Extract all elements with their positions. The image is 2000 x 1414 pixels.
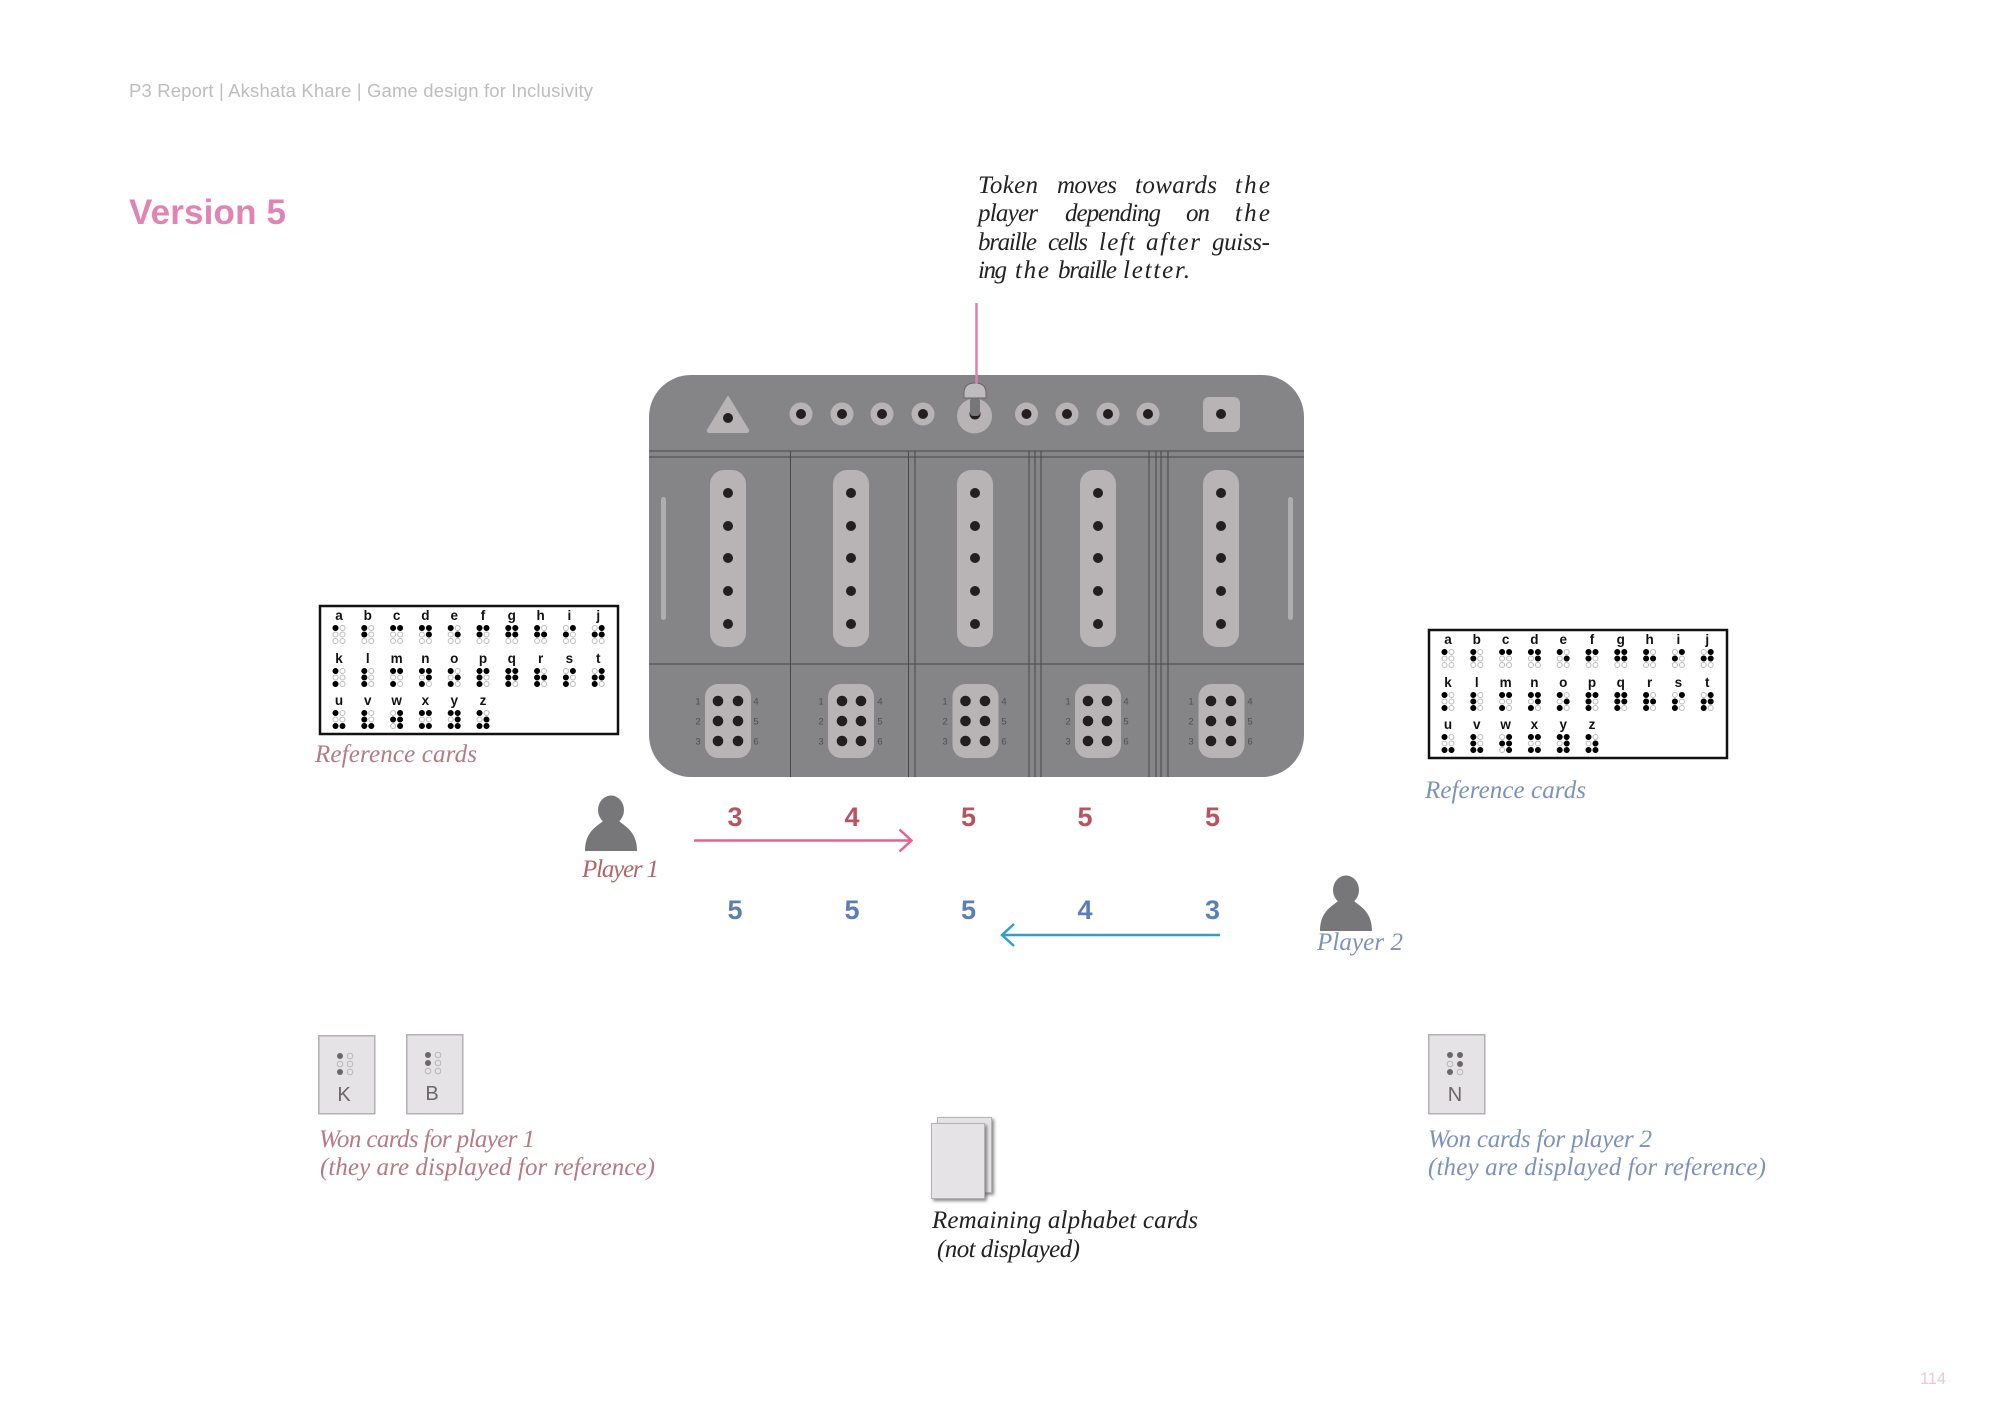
- icon: player 2: [1320, 876, 1372, 931]
- braille cells with numbered dots: 1: [1188, 696, 1194, 708]
- braille cells with numbered dots: 3: [695, 736, 701, 748]
- braille cells with numbered dots: 3: [1065, 736, 1071, 748]
- callout: token movement note: guiss-: [1212, 229, 1270, 256]
- braille cells with numbered dots: 6: [1123, 736, 1129, 748]
- callout: token movement note: after: [1146, 229, 1200, 256]
- callout: token movement note: cells: [1048, 229, 1088, 256]
- braille cells with numbered dots: 4: [877, 696, 883, 708]
- reference card: player 2: i: [1677, 632, 1680, 647]
- reference card: player 1: j: [595, 608, 600, 623]
- label: reference cards player 2: Reference cards: [1424, 777, 1586, 804]
- braille cells with numbered dots: 5: [1123, 716, 1129, 728]
- reference card: player 1: t: [596, 651, 601, 666]
- label: won cards player 1: (they are displayed for reference): [320, 1154, 655, 1181]
- callout: token movement note: on: [1186, 200, 1210, 227]
- reference card: player 2: q: [1617, 675, 1625, 690]
- reference card: player 2: f: [1590, 632, 1595, 647]
- braille cells with numbered dots: 6: [1247, 736, 1253, 748]
- callout: token movement note: depending: [1065, 200, 1161, 227]
- reference card: player 2: h: [1645, 632, 1654, 647]
- braille cells with numbered dots: 1: [1065, 696, 1071, 708]
- reference card: player 2: j: [1704, 632, 1709, 647]
- card: K: K: [337, 1084, 351, 1106]
- braille cells with numbered dots: 2: [942, 716, 948, 728]
- callout: token movement note: left: [1099, 229, 1136, 256]
- braille cells with numbered dots: 2: [1188, 716, 1194, 728]
- reference card: player 2: u: [1444, 717, 1452, 732]
- braille cells with numbered dots: 1: [695, 696, 701, 708]
- callout: token movement note: braille: [978, 229, 1037, 256]
- callout: token movement note: the: [1235, 200, 1270, 227]
- label: remaining alphabet cards: Remaining alphabet cards: [931, 1207, 1198, 1234]
- reference card: player 2: v: [1473, 717, 1481, 732]
- card: B: B: [425, 1083, 439, 1105]
- reference card: player 2: r: [1647, 675, 1653, 690]
- label: won cards player 1: [319, 1126, 655, 1181]
- stack of remaining cards: [932, 1118, 992, 1198]
- reference card: player 1: s: [566, 651, 573, 666]
- braille cells with numbered dots: 6: [753, 736, 759, 748]
- label: won cards player 1: Won cards for player 1: [319, 1126, 535, 1153]
- braille cells with numbered dots: 3: [818, 736, 824, 748]
- panel: game board: [649, 375, 1304, 777]
- card: N: [1429, 1035, 1485, 1114]
- reference card: player 1: r: [538, 651, 544, 666]
- label: player 2: Player 2: [1316, 929, 1403, 956]
- reference card: player 1: z: [480, 693, 487, 708]
- reference card: player 2: b: [1473, 632, 1481, 647]
- braille cells with numbered dots: 2: [818, 716, 824, 728]
- label: player 1: Player 1: [581, 856, 659, 883]
- callout: token movement note: towards: [1135, 172, 1217, 199]
- card: K: [319, 1036, 375, 1114]
- reference card: player 2: e: [1559, 632, 1567, 647]
- title: Version 5: [129, 193, 286, 232]
- braille cells with numbered dots: 5: [877, 716, 883, 728]
- board body: [649, 375, 1304, 777]
- scores: player 2: 4: [1077, 895, 1093, 925]
- reference card: player 1: m: [391, 651, 403, 666]
- reference card: player 1: b: [364, 608, 372, 623]
- reference card: player 1: u: [335, 693, 343, 708]
- label: won cards player 2: (they are displayed for reference): [1428, 1154, 1766, 1181]
- reference card: player 1: v: [364, 693, 372, 708]
- braille cells with numbered dots: 4: [753, 696, 759, 708]
- braille cells with numbered dots: 5: [753, 716, 759, 728]
- reference card: player 2: s: [1675, 675, 1682, 690]
- scores: player 1: 3: [727, 802, 743, 832]
- reference card: player 2: c: [1502, 632, 1510, 647]
- reference card: player 2: a: [1444, 632, 1452, 647]
- reference card: player 2: k: [1444, 675, 1452, 690]
- board divider lines: [649, 451, 1304, 777]
- reference card: player 1: e: [450, 608, 458, 623]
- reference card: player 1: p: [479, 651, 487, 666]
- reference card: player 1: o: [450, 651, 458, 666]
- braille cells with numbered dots: 4: [1001, 696, 1007, 708]
- scores: player 1: 5: [1077, 802, 1093, 832]
- icon: player 1: [585, 796, 637, 851]
- callout: token movement note: letter.: [1123, 257, 1190, 284]
- card: B: [407, 1035, 463, 1114]
- card: N: N: [1448, 1084, 1462, 1106]
- callout: token movement note: braille: [1058, 257, 1117, 284]
- braille cells with numbered dots: 2: [1065, 716, 1071, 728]
- reference card: player 1: y: [450, 693, 458, 708]
- scores: player 2: [727, 895, 1220, 925]
- reference card: player 1: l: [366, 651, 370, 666]
- reference card: player 1: [320, 606, 618, 734]
- reference card: player 2: o: [1559, 675, 1567, 690]
- braille cells with numbered dots: 2: [695, 716, 701, 728]
- reference card: player 2: t: [1705, 675, 1710, 690]
- reference card: player 1: i: [568, 608, 571, 623]
- reference card: player 2: l: [1475, 675, 1479, 690]
- braille cells with numbered dots: 6: [877, 736, 883, 748]
- leader line to token: [975, 303, 978, 384]
- scores: player 2: 3: [1205, 895, 1220, 925]
- reference card: player 1: x: [422, 693, 430, 708]
- arrow: player 1 direction: [694, 830, 912, 852]
- label: reference cards player 1: Reference cards: [314, 741, 477, 768]
- braille cells with numbered dots: 3: [942, 736, 948, 748]
- label: remaining alphabet cards: (not displayed): [937, 1236, 1080, 1263]
- braille cells with numbered dots: 5: [1247, 716, 1253, 728]
- reference card: player 2: [1429, 630, 1727, 758]
- braille cells with numbered dots: 5: [1001, 716, 1007, 728]
- game token: [964, 383, 986, 416]
- callout: token movement note: [976, 172, 1270, 284]
- scores: player 1: 5: [1205, 802, 1220, 832]
- scores: player 1: [727, 802, 1220, 832]
- side handles: [661, 497, 1293, 620]
- column slots with five holes: [710, 470, 1239, 647]
- reference card: player 1: n: [421, 651, 430, 666]
- reference card: player 1: g: [508, 608, 516, 623]
- reference card: player 2: n: [1530, 675, 1539, 690]
- callout: token movement note: the: [1235, 172, 1270, 199]
- callout: token movement note: Token: [978, 172, 1038, 199]
- reference card: player 1: h: [536, 608, 545, 623]
- page number: 114: [1920, 1370, 1946, 1388]
- reference card: player 1: a: [335, 608, 343, 623]
- reference card: player 2: w: [1499, 717, 1511, 732]
- braille cells with numbered dots: [695, 684, 1253, 758]
- track: start triangle, position holes and end square: [708, 397, 1240, 434]
- scores: player 2: 5: [727, 895, 743, 925]
- reference card: player 2: y: [1559, 717, 1567, 732]
- braille cells with numbered dots: 1: [942, 696, 948, 708]
- reference card: player 2: m: [1500, 675, 1512, 690]
- reference card: player 1: w: [390, 693, 402, 708]
- header line: P3 Report | Akshata Khare | Game design for Inclusivity: [129, 80, 594, 101]
- reference card: player 1: c: [393, 608, 401, 623]
- label: won cards player 2: [1428, 1126, 1766, 1181]
- reference card: player 1: f: [481, 608, 486, 623]
- reference card: player 1: q: [508, 651, 516, 666]
- label: remaining alphabet cards: [931, 1207, 1198, 1263]
- reference card: player 2: x: [1531, 717, 1539, 732]
- braille cells with numbered dots: 3: [1188, 736, 1194, 748]
- arrow: player 2 direction: [1002, 924, 1220, 946]
- reference card: player 2: d: [1530, 632, 1539, 647]
- reference card: player 2: g: [1617, 632, 1625, 647]
- scores: player 2: 5: [961, 895, 976, 925]
- braille cells with numbered dots: 4: [1123, 696, 1129, 708]
- callout: token movement note: player: [976, 200, 1038, 227]
- scores: player 2: 5: [844, 895, 860, 925]
- reference card: player 2: p: [1588, 675, 1596, 690]
- reference card: player 1: k: [335, 651, 343, 666]
- callout: token movement note: moves: [1057, 172, 1117, 199]
- reference card: player 1: d: [421, 608, 430, 623]
- braille cells with numbered dots: 6: [1001, 736, 1007, 748]
- callout: token movement note: ing: [978, 257, 1007, 284]
- reference card: player 2: z: [1589, 717, 1596, 732]
- scores: player 1: 5: [961, 802, 976, 832]
- braille cells with numbered dots: 4: [1247, 696, 1253, 708]
- braille cells with numbered dots: 1: [818, 696, 824, 708]
- callout: token movement note: the: [1015, 257, 1049, 284]
- scores: player 1: 4: [844, 802, 860, 832]
- label: won cards player 2: Won cards for player 2: [1428, 1126, 1652, 1153]
